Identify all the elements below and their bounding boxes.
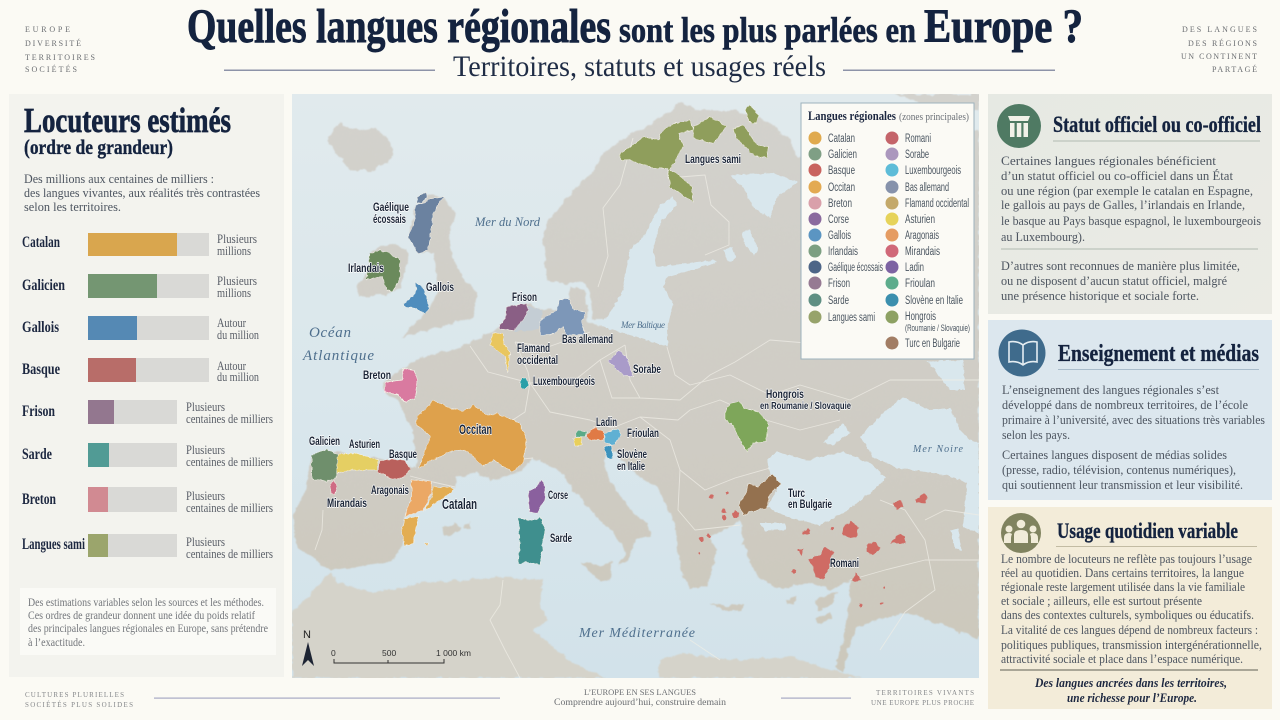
bar: basque: du million xyxy=(217,370,260,384)
map labels: occidental xyxy=(517,353,558,367)
region: flamand occidental xyxy=(490,333,510,373)
legend column 1: Gaélique écossais xyxy=(828,262,883,274)
scale bar xyxy=(331,650,470,664)
legend column 2: Sorabe xyxy=(905,149,929,161)
footer: Comprendre aujourd’hui, construire demain xyxy=(554,698,726,708)
intro text: selon les territoires. xyxy=(24,199,121,214)
bar: catalan xyxy=(22,232,257,258)
text block: statut 1: le basque au Pays basque espagnol, le luxembourgeois xyxy=(1001,213,1261,228)
icon: pillars xyxy=(997,104,1041,148)
map labels: Gallois xyxy=(426,280,454,294)
map labels: Catalan xyxy=(442,496,477,513)
map labels: Langues sami xyxy=(685,152,741,166)
region: sorabe xyxy=(608,350,633,377)
map labels: Hongrois xyxy=(766,387,804,401)
bar: gallois: du million xyxy=(217,328,260,342)
text block: médias xyxy=(1002,447,1243,492)
text block: usage: régionale reste largement utilisée dans la vie familiale xyxy=(1001,579,1245,594)
bar: basque xyxy=(22,358,260,384)
text block: vitalité: politiques publiques, transmission intergénérationnelle, xyxy=(1001,637,1262,652)
region: gallois xyxy=(403,282,430,313)
map labels: Asturien xyxy=(349,437,380,451)
map labels: Gaélique xyxy=(373,200,409,214)
legend title: (zones principales) xyxy=(899,112,969,123)
region: galicien xyxy=(312,449,338,482)
intro text xyxy=(24,171,260,214)
text block: vitalité: attractivité sociale et place dans l’espace numérique. xyxy=(1001,651,1243,666)
bar: langues sami: Plusieurs xyxy=(186,535,225,549)
text block: statut 1: au Luxembourg). xyxy=(1001,229,1085,244)
region: basque xyxy=(378,460,410,480)
map labels: en Bulgarie xyxy=(788,497,832,511)
text block: statut 2: D’autres sont reconnues de manière plus limitée, xyxy=(1001,258,1240,273)
region: gaélique écossais xyxy=(408,192,443,253)
map labels: Breton xyxy=(363,368,391,382)
icon: north arrow: N xyxy=(303,629,311,641)
title: Quelles langues régionales xyxy=(187,0,611,53)
legend column 2: Slovène en Italie xyxy=(905,295,963,307)
closing statement: Des langues ancrées dans les territoires, xyxy=(1034,675,1227,690)
region: slovène en Italie xyxy=(603,445,613,458)
bar: langues sami xyxy=(22,534,273,561)
bar: frison xyxy=(22,400,273,426)
legend column 2: Bas allemand xyxy=(905,182,949,194)
legend column 2: Flamand occidental xyxy=(905,198,969,210)
bar: langues sami: Langues sami xyxy=(22,536,85,553)
sea labels: Atlantique xyxy=(302,348,374,364)
note: estimations xyxy=(20,588,276,655)
bar: galicien xyxy=(22,274,257,300)
heading: locuteurs estimés: Locuteurs estimés xyxy=(24,101,231,140)
map labels: Irlandais xyxy=(348,261,384,275)
map labels: Slovène xyxy=(617,447,647,461)
scale bar: 0 xyxy=(331,648,336,658)
map labels: en Roumanie / Slovaquie xyxy=(760,400,851,412)
icon: people xyxy=(1001,513,1041,553)
legend column 1: Basque xyxy=(828,165,855,177)
region: frioulan vert xyxy=(575,430,587,437)
legend column 2: (Roumanie / Slovaquie) xyxy=(905,323,970,333)
land masses xyxy=(292,94,979,678)
region: romani xyxy=(698,492,928,608)
text block: statut 1: ou une région (par exemple le catalan en Espagne, xyxy=(1001,183,1253,198)
bar: catalan: millions xyxy=(217,244,251,258)
legend column 2: Ladin xyxy=(905,262,924,274)
bar: sarde: Plusieurs xyxy=(186,443,225,457)
header: left keywords: DIVERSITÉ xyxy=(25,38,81,48)
map labels: Basque xyxy=(389,447,417,461)
sub-heading: (ordre de grandeur) xyxy=(24,135,173,159)
bar: gallois: Gallois xyxy=(22,319,59,336)
panel: locuteurs estimés xyxy=(9,94,284,677)
panel: statut officiel xyxy=(988,94,1272,314)
map labels: en Italie xyxy=(617,459,645,473)
map labels: Bas allemand xyxy=(562,332,613,346)
bar: breton: Breton xyxy=(22,491,56,508)
map labels: Corse xyxy=(548,488,568,502)
regions: language areas xyxy=(312,105,928,608)
sea labels: Mer Méditerranée xyxy=(578,626,695,641)
scale bar: 500 xyxy=(382,648,396,658)
sea labels: Mer Noire xyxy=(912,444,964,455)
region: turc en Bulgarie xyxy=(738,475,781,515)
region: irlandais xyxy=(367,250,400,292)
scale bar: 1 000 km xyxy=(436,648,471,658)
region: frioulan xyxy=(605,428,622,445)
title: sont les plus parlées en xyxy=(619,10,916,50)
legend column 1: Breton xyxy=(828,198,852,210)
panel: enseignement et médias xyxy=(988,320,1272,500)
intro text: Des millions aux centaines de milliers : xyxy=(24,171,214,186)
bar: basque: Autour xyxy=(217,359,247,373)
legend column 2: Mirandais xyxy=(905,246,940,258)
bar: frison: Plusieurs xyxy=(186,400,225,414)
legend column 1: Frison xyxy=(828,278,850,290)
bar: gallois xyxy=(22,316,260,342)
region: langues sami xyxy=(620,105,768,202)
region: occitan xyxy=(415,400,527,472)
footer: SOCIÉTÉS PLUS SOLIDES xyxy=(25,701,133,709)
subtitle: Territoires, statuts et usages réels xyxy=(453,50,826,83)
header: right keywords xyxy=(1181,25,1257,74)
footer xyxy=(25,687,974,709)
text block: statut 1: d’un statut officiel ou co-officiel dans un État xyxy=(1001,168,1233,183)
text block: statut 1 xyxy=(1001,153,1261,244)
panel: usage quotidien xyxy=(988,507,1272,709)
text block: enseignement: développé dans de nombreux territoires, de l’école xyxy=(1002,397,1248,412)
panel: map of Europe xyxy=(292,94,979,678)
bar: sarde: centaines de milliers xyxy=(186,455,273,469)
map labels: Frioulan xyxy=(627,426,659,440)
region: luxembourgeois xyxy=(520,378,528,389)
header: right keywords: DES RÉGIONS xyxy=(1188,38,1257,48)
legend column 2: Hongrois xyxy=(905,311,936,323)
legend column 1: Catalan xyxy=(828,133,855,145)
bar: sarde: Sarde xyxy=(22,446,52,463)
sea labels xyxy=(302,215,964,641)
legend column 2 xyxy=(886,132,970,350)
note: estimations: à l’exactitude. xyxy=(28,637,85,649)
bar: frison: Frison xyxy=(22,403,55,420)
legend column 1: Irlandais xyxy=(828,246,858,258)
note: estimations: Ces ordres de grandeur donnent une idée du poids relatif xyxy=(28,610,255,622)
bar: breton: Plusieurs xyxy=(186,489,225,503)
map labels: Turc xyxy=(788,486,805,500)
closing statement xyxy=(1034,675,1227,705)
icon: north arrow xyxy=(302,629,314,666)
bar: langues sami: centaines de milliers xyxy=(186,547,273,561)
icon: book xyxy=(998,330,1046,376)
text block: statut 2: une présence historique et sociale forte. xyxy=(1001,288,1199,303)
region: mirandais xyxy=(330,479,337,495)
text block: enseignement: L’enseignement des langues régionales s’est xyxy=(1002,382,1219,397)
map labels xyxy=(309,152,859,570)
region: sarde xyxy=(518,517,545,565)
note: estimations: des principales langues régionales en Europe, sans prétendre xyxy=(28,623,268,635)
region: catalan xyxy=(402,487,455,547)
intro text: des langues vivantes, aux réalités très contrastées xyxy=(24,185,260,200)
map labels: Occitan xyxy=(459,422,492,437)
legend column 1: Langues sami xyxy=(828,312,875,324)
region: aragonais xyxy=(405,480,432,517)
text block: médias: qui soutiennent leur transmission et leur visibilité. xyxy=(1002,477,1243,492)
region: zone jaune xyxy=(573,437,582,447)
bar: sarde xyxy=(22,443,273,469)
legend column 1: Corse xyxy=(828,214,849,226)
header: left keywords: EUROPE xyxy=(25,25,70,34)
sea labels: Mer Baltique xyxy=(620,320,665,330)
bar: galicien: Plusieurs xyxy=(217,274,257,288)
text block: statut 1: Certaines langues régionales bénéficient xyxy=(1001,153,1216,168)
map labels: Ladin xyxy=(596,415,617,429)
map labels: Romani xyxy=(830,556,859,570)
text block: usage: Le nombre de locuteurs ne reflète pas toujours l’usage xyxy=(1001,551,1252,566)
text block: vitalité xyxy=(1001,622,1262,666)
bar: breton: centaines de milliers xyxy=(186,501,273,515)
closing statement: une richesse pour l’Europe. xyxy=(1067,690,1197,705)
legend column 2: Aragonais xyxy=(905,230,939,242)
footer: UNE EUROPE PLUS PROCHE xyxy=(871,699,974,707)
text block: statut 2: ou ne disposent d’aucun statut officiel, malgré xyxy=(1001,273,1227,288)
footer: L’EUROPE EN SES LANGUES xyxy=(584,687,696,697)
title: Europe ? xyxy=(924,0,1083,53)
legend column 1 xyxy=(808,132,883,324)
map labels: Mirandais xyxy=(327,496,367,510)
legend column 1: Galicien xyxy=(828,149,857,161)
bar: catalan: Catalan xyxy=(22,234,60,251)
text block: usage: et sociale ; ailleurs, elle est surtout présente xyxy=(1001,593,1202,608)
footer: CULTURES PLURIELLES xyxy=(25,691,124,699)
legend column 1: Gallois xyxy=(828,230,851,242)
region: zone néerlandaise claire xyxy=(513,307,543,332)
legend column 2: Frioulan xyxy=(905,278,935,290)
map labels: Flamand xyxy=(517,341,550,355)
note: estimations: Des estimations variables selon les sources et les méthodes. xyxy=(28,597,264,609)
text block: médias: Certaines langues disposent de médias solides xyxy=(1002,447,1227,462)
region: bas allemand xyxy=(540,298,587,335)
text block: statut 2 xyxy=(1001,258,1240,303)
text block: usage: réel au quotidien. Dans certains territoires, la langue xyxy=(1001,565,1244,580)
map labels: écossais xyxy=(373,212,406,226)
inland and enclosed waters xyxy=(593,173,979,550)
text block: statut 1: le gallois au pays de Galles, l’irlandais en Irlande, xyxy=(1001,197,1245,212)
text block: enseignement: selon les pays. xyxy=(1002,427,1070,442)
legend column 2: Asturien xyxy=(905,214,935,226)
text block: enseignement xyxy=(1002,382,1265,442)
region: frison xyxy=(498,303,528,330)
region: corse xyxy=(528,480,545,513)
region: hongrois xyxy=(725,402,768,452)
region: asturien xyxy=(337,453,378,473)
legend column 2: Romani xyxy=(905,133,931,145)
bar: galicien: Galicien xyxy=(22,277,65,294)
country borders xyxy=(315,138,979,678)
header: right keywords: UN CONTINENT xyxy=(1181,52,1257,61)
text block: usage: dans des contextes culturels, symboliques ou éducatifs. xyxy=(1001,607,1254,622)
header: left keywords: SOCIÉTÉS xyxy=(25,64,77,74)
sea labels: Mer du Nord xyxy=(474,215,541,229)
header: right keywords: DES LANGUES xyxy=(1182,25,1257,34)
bar: basque: Basque xyxy=(22,361,60,378)
bar: breton xyxy=(22,487,273,515)
title xyxy=(187,0,1083,53)
map labels: Sarde xyxy=(550,531,572,545)
header: left keywords: TERRITOIRES xyxy=(25,53,95,62)
legend column 2: Turc en Bulgarie xyxy=(905,338,960,350)
map labels: Luxembourgeois xyxy=(533,374,595,388)
bar: gallois: Autour xyxy=(217,316,247,330)
legend column 1: Sarde xyxy=(828,295,849,307)
header: left keywords xyxy=(25,25,95,74)
sea labels: Océan xyxy=(309,325,351,341)
bar: galicien: millions xyxy=(217,286,251,300)
text block: usage xyxy=(1001,551,1254,622)
region: breton xyxy=(385,368,417,402)
legend title: Langues régionales xyxy=(808,108,896,123)
bar: catalan: Plusieurs xyxy=(217,232,257,246)
map labels: Aragonais xyxy=(371,483,409,497)
footer: TERRITOIRES VIVANTS xyxy=(876,689,974,697)
map labels: Galicien xyxy=(309,434,340,448)
legend column 1: Occitan xyxy=(828,182,855,194)
text block: médias: (presse, radio, télévision, contenus numériques), xyxy=(1002,462,1236,477)
header: right keywords: PARTAGÉ xyxy=(1212,64,1257,74)
map labels: Frison xyxy=(512,290,537,304)
legend column 2: Luxembourgeois xyxy=(905,165,961,177)
map labels: Sorabe xyxy=(633,362,661,376)
region: ladin xyxy=(587,427,605,440)
bar: frison: centaines de milliers xyxy=(186,412,273,426)
legend xyxy=(801,103,974,359)
legend title xyxy=(808,111,969,122)
